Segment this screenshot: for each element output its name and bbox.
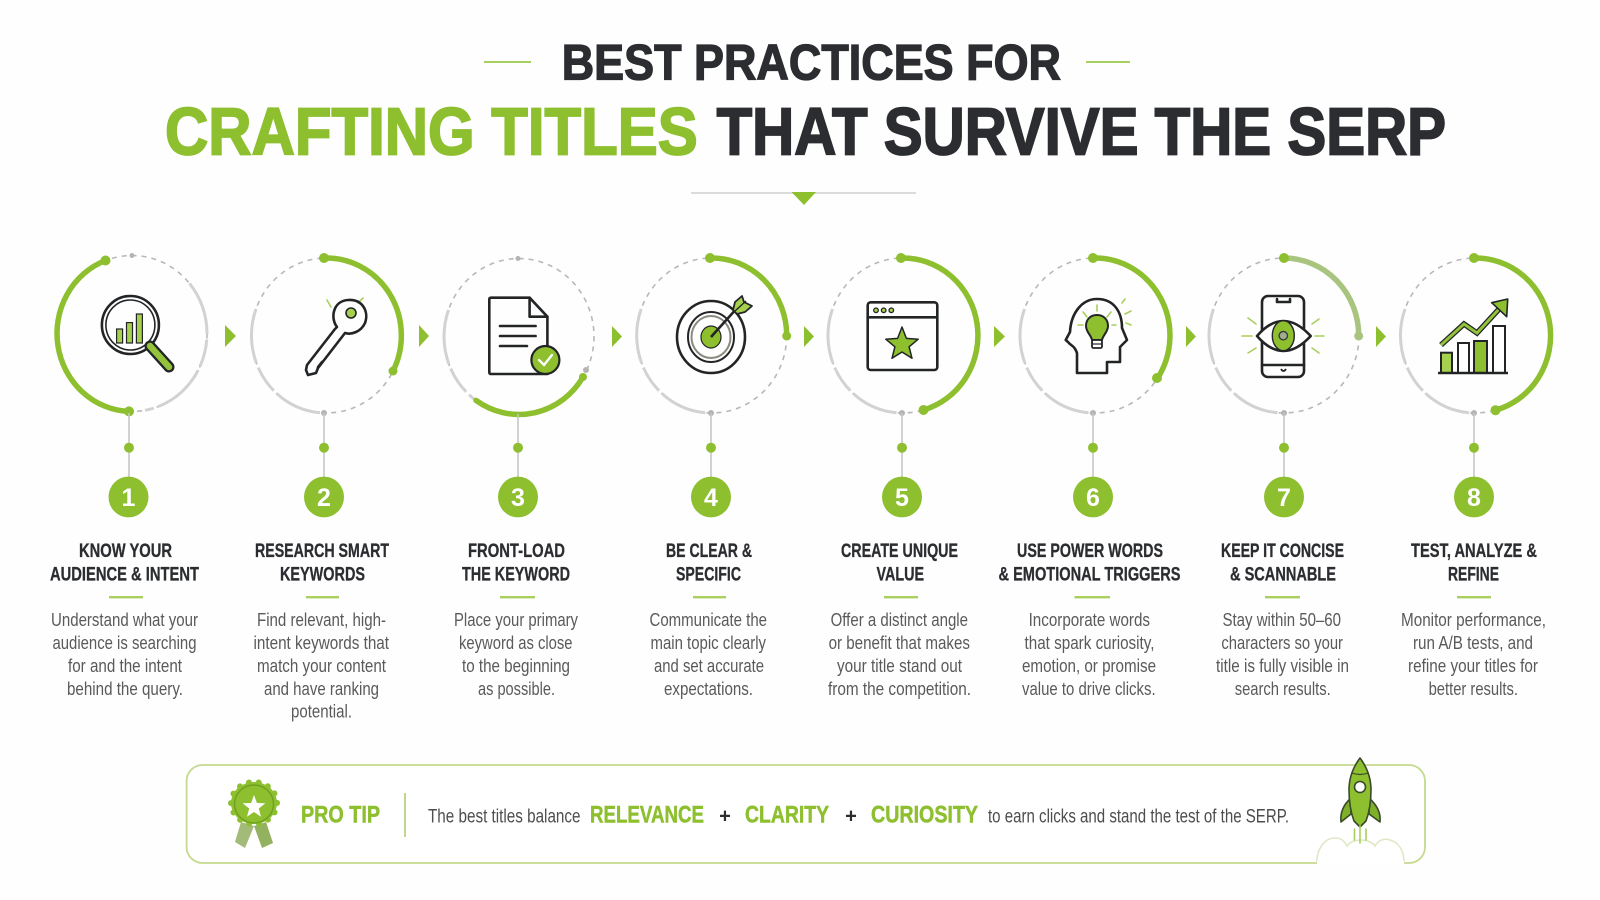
heading 2: KEYWORDS (280, 564, 365, 586)
progress ring 4 (637, 253, 791, 416)
title line two green: CRAFTING TITLES (165, 94, 698, 170)
pro tip label: PRO TIP (301, 802, 380, 829)
body 1: Understand what your (51, 609, 198, 630)
arrow (225, 325, 236, 347)
heading 3 (462, 541, 570, 598)
body 7: title is fully visible in (1216, 655, 1349, 676)
heading 8: TEST, ANALYZE & (1411, 541, 1537, 562)
progress ring 1 (57, 253, 207, 416)
progress ring 5 (828, 253, 978, 416)
heading 8 (1411, 541, 1537, 598)
icon: key (306, 298, 366, 375)
tip sentence: RELEVANCE (590, 802, 704, 829)
body 4: expectations. (664, 678, 753, 699)
number badge 1 (108, 477, 148, 517)
icon: growth chart (1438, 299, 1508, 373)
body 5: from the competition. (828, 678, 971, 699)
progress ring 8 (1400, 253, 1551, 416)
icon: document with check badge (489, 298, 559, 374)
progress ring 2 (251, 253, 402, 416)
panel: pro tip (187, 758, 1425, 865)
body 8: better results. (1429, 678, 1518, 699)
connector (513, 414, 523, 478)
body 4: main topic clearly (650, 632, 767, 653)
body 3: Place your primary (454, 609, 579, 630)
arrow (804, 326, 814, 347)
body 4: and set accurate (654, 655, 764, 676)
connector (706, 413, 716, 478)
heading 5 (841, 541, 958, 598)
progress ring 3 (444, 256, 594, 414)
heading 6: & EMOTIONAL TRIGGERS (998, 564, 1180, 586)
number badge 2 (304, 477, 344, 517)
body 1: behind the query. (67, 678, 183, 699)
body 5: your title stand out (837, 655, 962, 676)
title divider (691, 192, 916, 205)
heading 3: FRONT-LOAD (468, 541, 565, 562)
heading 1: AUDIENCE & INTENT (50, 564, 199, 586)
body 2 (254, 609, 389, 722)
heading 7: & SCANNABLE (1230, 564, 1336, 586)
body 6: value to drive clicks. (1022, 678, 1156, 699)
connector (897, 413, 907, 478)
body 7: Stay within 50–60 (1222, 609, 1341, 630)
heading 6 (998, 541, 1180, 598)
heading 4 (666, 541, 752, 598)
number badge 6 (1073, 477, 1113, 517)
connector (124, 413, 134, 478)
connector (319, 413, 329, 478)
step 1: know your audience (50, 253, 236, 699)
body 8 (1401, 609, 1546, 699)
body 3: keyword as close (459, 632, 572, 653)
number badge 1: 1 (122, 484, 136, 512)
title (165, 34, 1446, 170)
body 2: potential. (291, 700, 352, 722)
arrow (419, 325, 429, 347)
body 8: run A/B tests, and (1413, 632, 1533, 653)
heading 6: USE POWER WORDS (1017, 541, 1163, 562)
body 2: match your content (257, 655, 386, 676)
tip sentence: The best titles balance (428, 806, 580, 828)
body 3: to the beginning (462, 655, 570, 676)
title line two dark: THAT SURVIVE THE SERP (717, 94, 1446, 170)
body 1 (51, 609, 198, 699)
step 3: front-load the keyword (444, 256, 622, 699)
arrow (1376, 326, 1386, 347)
number badge 3: 3 (511, 484, 525, 512)
number badge 6: 6 (1086, 484, 1100, 512)
tip sentence: + (719, 806, 731, 828)
heading 5: VALUE (876, 564, 924, 586)
body 7: search results. (1235, 678, 1331, 699)
step 4: be clear and specific (637, 253, 814, 699)
number badge 4: 4 (704, 484, 718, 512)
step 7: keep it concise (1209, 253, 1386, 699)
body 5 (828, 609, 971, 699)
step 6: use power words (998, 253, 1196, 699)
icon: award medal (231, 782, 277, 848)
body 3 (454, 609, 579, 699)
number badge 7: 7 (1277, 484, 1291, 512)
title line one: BEST PRACTICES FOR (562, 34, 1061, 90)
body 3: as possible. (478, 678, 555, 699)
progress ring 6 (1020, 253, 1170, 416)
arrow (994, 326, 1005, 347)
number badge 8: 8 (1467, 484, 1481, 512)
icon: magnifier with bar chart (102, 296, 169, 367)
icon: target with dart (677, 296, 752, 373)
arrow (1186, 326, 1196, 347)
heading 7: KEEP IT CONCISE (1221, 541, 1344, 562)
heading 4: BE CLEAR & (666, 541, 752, 562)
heading 1: KNOW YOUR (79, 541, 172, 562)
number badge 7 (1264, 477, 1304, 517)
heading 2: RESEARCH SMART (255, 541, 389, 562)
icon: rocket launching from cloud (1317, 758, 1404, 865)
body 7 (1216, 609, 1349, 699)
progress ring 7 (1209, 253, 1363, 416)
body 1: for and the intent (68, 655, 182, 676)
tip sentence: CLARITY (745, 802, 829, 829)
icon: head with lightbulb (1066, 299, 1131, 373)
body 4 (650, 609, 767, 699)
connector (1279, 413, 1289, 478)
body 5: Offer a distinct angle (831, 609, 968, 630)
heading 8: REFINE (1448, 564, 1499, 586)
body 6: that spark curiosity, (1024, 632, 1154, 653)
body 8: refine your titles for (1408, 655, 1538, 676)
tip sentence: CURIOSITY (871, 802, 978, 829)
number badge 4 (691, 477, 731, 517)
number badge 3 (498, 477, 538, 517)
heading 2 (255, 541, 389, 598)
number badge 2: 2 (317, 484, 331, 512)
body 1: audience is searching (52, 632, 196, 653)
number badge 5 (882, 477, 922, 517)
body 2: Find relevant, high- (257, 609, 386, 630)
heading 1 (50, 541, 199, 598)
step 2: research smart keywords (251, 253, 429, 722)
body 7: characters so your (1221, 632, 1343, 653)
number badge 5: 5 (895, 484, 909, 512)
step 8: test analyze refine (1400, 253, 1551, 699)
tip sentence (428, 802, 1289, 829)
heading 4: SPECIFIC (676, 564, 741, 586)
heading 7 (1221, 541, 1344, 598)
body 4: Communicate the (650, 609, 767, 630)
body 6 (1022, 609, 1156, 699)
body 2: and have ranking (264, 678, 379, 699)
icon: browser window with star (868, 302, 937, 370)
heading 3: THE KEYWORD (462, 564, 570, 586)
body 6: emotion, or promise (1022, 655, 1156, 676)
connector (1088, 413, 1098, 478)
body 2: intent keywords that (254, 632, 389, 653)
icon: phone with eye (1242, 296, 1324, 377)
body 6: Incorporate words (1029, 609, 1150, 630)
tip sentence: + (845, 806, 857, 828)
number badge 8 (1454, 477, 1494, 517)
step 5: create unique value (828, 253, 1005, 699)
arrow (612, 326, 622, 347)
body 8: Monitor performance, (1401, 609, 1546, 630)
tip sentence: to earn clicks and stand the test of the SERP. (988, 806, 1289, 828)
heading 5: CREATE UNIQUE (841, 541, 958, 562)
connector (1469, 413, 1479, 478)
body 5: or benefit that makes (829, 632, 970, 653)
